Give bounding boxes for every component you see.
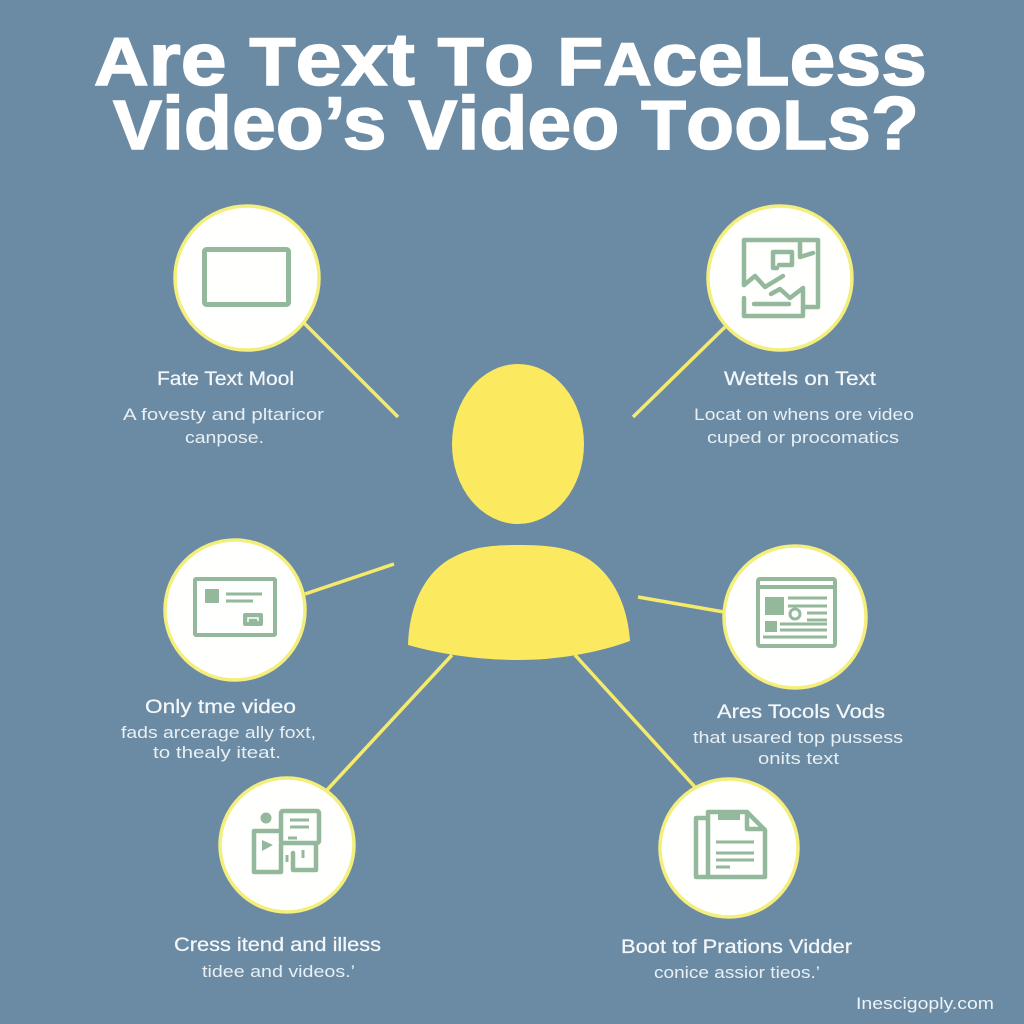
connector lines: [303, 322, 725, 790]
text: top left caption: [123, 369, 324, 447]
title: [94, 18, 927, 165]
icon: chart document: [708, 206, 852, 350]
text: top left caption: A fovesty and pltaricor: [123, 405, 324, 424]
text: top left caption: canpose.: [185, 428, 264, 447]
text: middle left caption: fads arcerage ally foxt,: [121, 723, 316, 742]
panel: top left tool: [123, 206, 324, 447]
panel: middle right tool: [693, 546, 903, 768]
text: top right caption: cuped or procomatics: [707, 428, 899, 447]
text: top right caption: Wettels on Text: [724, 369, 877, 390]
icon: video card: [165, 540, 305, 680]
text: middle right caption: onits text: [758, 749, 839, 768]
icon: web page layout: [724, 546, 866, 688]
icon: stacked documents: [660, 779, 798, 917]
text: bottom right caption: Boot tof Prations Vidder: [621, 937, 853, 958]
watermark: Inescigoply.com: [856, 994, 994, 1013]
title: Are Text To FAceLess: [94, 18, 927, 101]
text: bottom left caption: tidee and videos.’: [202, 962, 355, 981]
panel: middle left tool: [121, 540, 316, 762]
text: bottom left caption: Cress itend and illess: [174, 935, 381, 956]
panel: bottom right tool: [621, 779, 853, 982]
text: bottom left caption: [174, 935, 381, 981]
title: Video’s Video TooLs?: [113, 81, 919, 165]
icon: phone and document: [220, 778, 354, 912]
text: middle left caption: [121, 697, 316, 762]
text: middle left caption: to thealy iteat.: [153, 743, 281, 762]
central person figure: [408, 364, 630, 660]
text: bottom right caption: [621, 937, 853, 982]
text: top right caption: [694, 369, 914, 447]
panel: bottom left tool: [174, 778, 381, 981]
text: top right caption: Locat on whens ore video: [694, 405, 914, 424]
text: middle right caption: Ares Tocols Vods: [717, 702, 885, 723]
icon: blank screen: [175, 206, 319, 350]
text: top left caption: Fate Text Mool: [157, 369, 294, 390]
text: middle right caption: that usared top pussess: [693, 728, 903, 747]
text: bottom right caption: conice assior tieos.’: [654, 963, 820, 982]
text: middle right caption: [693, 702, 903, 768]
text: middle left caption: Only tme video: [145, 697, 296, 718]
panel: top right tool: [694, 206, 914, 447]
